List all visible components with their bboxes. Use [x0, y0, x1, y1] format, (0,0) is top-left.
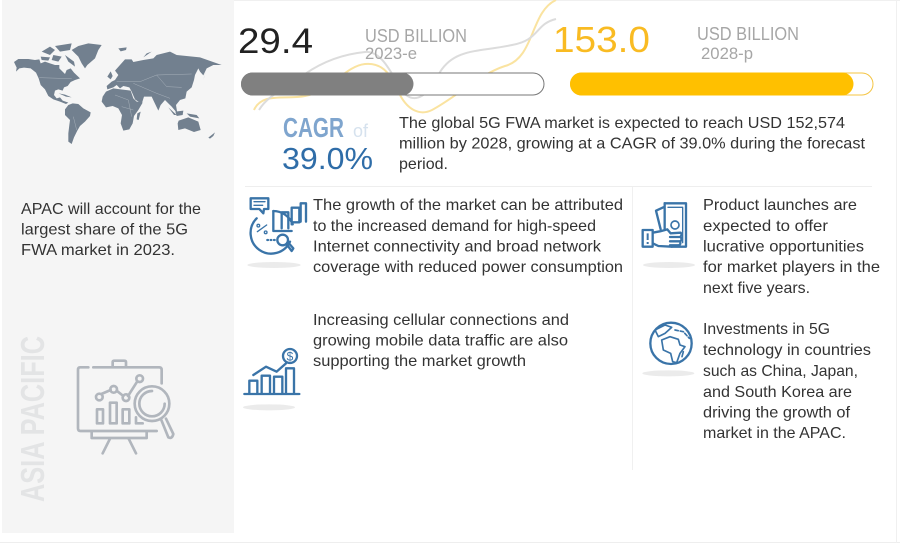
growth text — [313, 197, 623, 276]
investments text — [703, 321, 871, 442]
investments text: and South Korea are — [703, 384, 852, 401]
investments text: Investments in 5G — [703, 321, 830, 338]
value: 2023: USD BILLION — [365, 26, 467, 46]
world map — [14, 43, 222, 144]
connections text — [313, 312, 569, 370]
region summary text: FWA market in 2023. — [21, 242, 175, 259]
investments text: technology in countries — [703, 342, 871, 359]
market summary text: The global 5G FWA market is expected to reach USD 152,574 — [399, 115, 845, 132]
panel: asia pacific — [2, 0, 234, 533]
icon: rising bars with coin — [243, 349, 299, 410]
investments text: such as China, Japan, — [703, 363, 858, 380]
icon: globe — [642, 323, 694, 376]
region summary text: APAC will account for the — [21, 201, 201, 218]
product launches text: expected to offer — [703, 218, 829, 235]
product launches text: for market players in the — [703, 259, 880, 276]
CAGR callout — [282, 112, 373, 176]
value: 2028: USD BILLION — [697, 24, 799, 44]
value: 2028 — [553, 19, 799, 63]
growth text: to the increased demand for high-speed — [313, 218, 596, 235]
region summary text — [21, 201, 201, 259]
vertical label: asia pacific: ASIA PACIFIC — [14, 336, 51, 502]
investments text: driving the growth of — [703, 404, 851, 422]
market summary text — [399, 115, 866, 173]
progress bar: 2023 — [241, 72, 544, 96]
product launches text: Product launches are — [703, 197, 857, 214]
CAGR callout: 39.0% — [282, 141, 373, 176]
value: 2028: 2028-p — [701, 44, 753, 63]
progress bar: 2028 — [570, 72, 873, 96]
growth text: Internet connectivity and broad network — [313, 238, 602, 256]
value: 2023: 29.4 — [238, 22, 313, 61]
product launches text — [703, 197, 880, 297]
growth text: The growth of the market can be attributed — [313, 197, 623, 214]
region summary text: largest share of the 5G — [21, 222, 188, 238]
icon: rising bars with coin: $ — [287, 349, 294, 363]
icon: presentation board with magnifier — [78, 361, 173, 453]
connections text: Increasing cellular connections and — [313, 312, 569, 329]
connections text: supporting the market growth — [313, 353, 526, 370]
value: 2023 — [238, 22, 467, 63]
market summary text: million by 2028, growing at a CAGR of 39.0% during the forecast — [399, 136, 866, 152]
icon: analytics report — [247, 198, 306, 268]
growth text: coverage with reduced power consumption — [313, 259, 623, 276]
icon: hand holding money — [643, 203, 695, 268]
product launches text: next five years. — [703, 280, 810, 297]
decorative curves — [254, 0, 556, 112]
connections text: growing mobile data traffic are also — [313, 332, 568, 350]
CAGR callout: CAGR — [283, 112, 344, 143]
value: 2028: 153.0 — [553, 19, 650, 60]
CAGR callout: of — [353, 121, 369, 141]
investments text: market in the APAC. — [703, 425, 846, 442]
product launches text: lucrative opportunities — [703, 238, 864, 256]
market summary text: period. — [399, 156, 448, 173]
value: 2023: 2023-e — [365, 44, 417, 63]
